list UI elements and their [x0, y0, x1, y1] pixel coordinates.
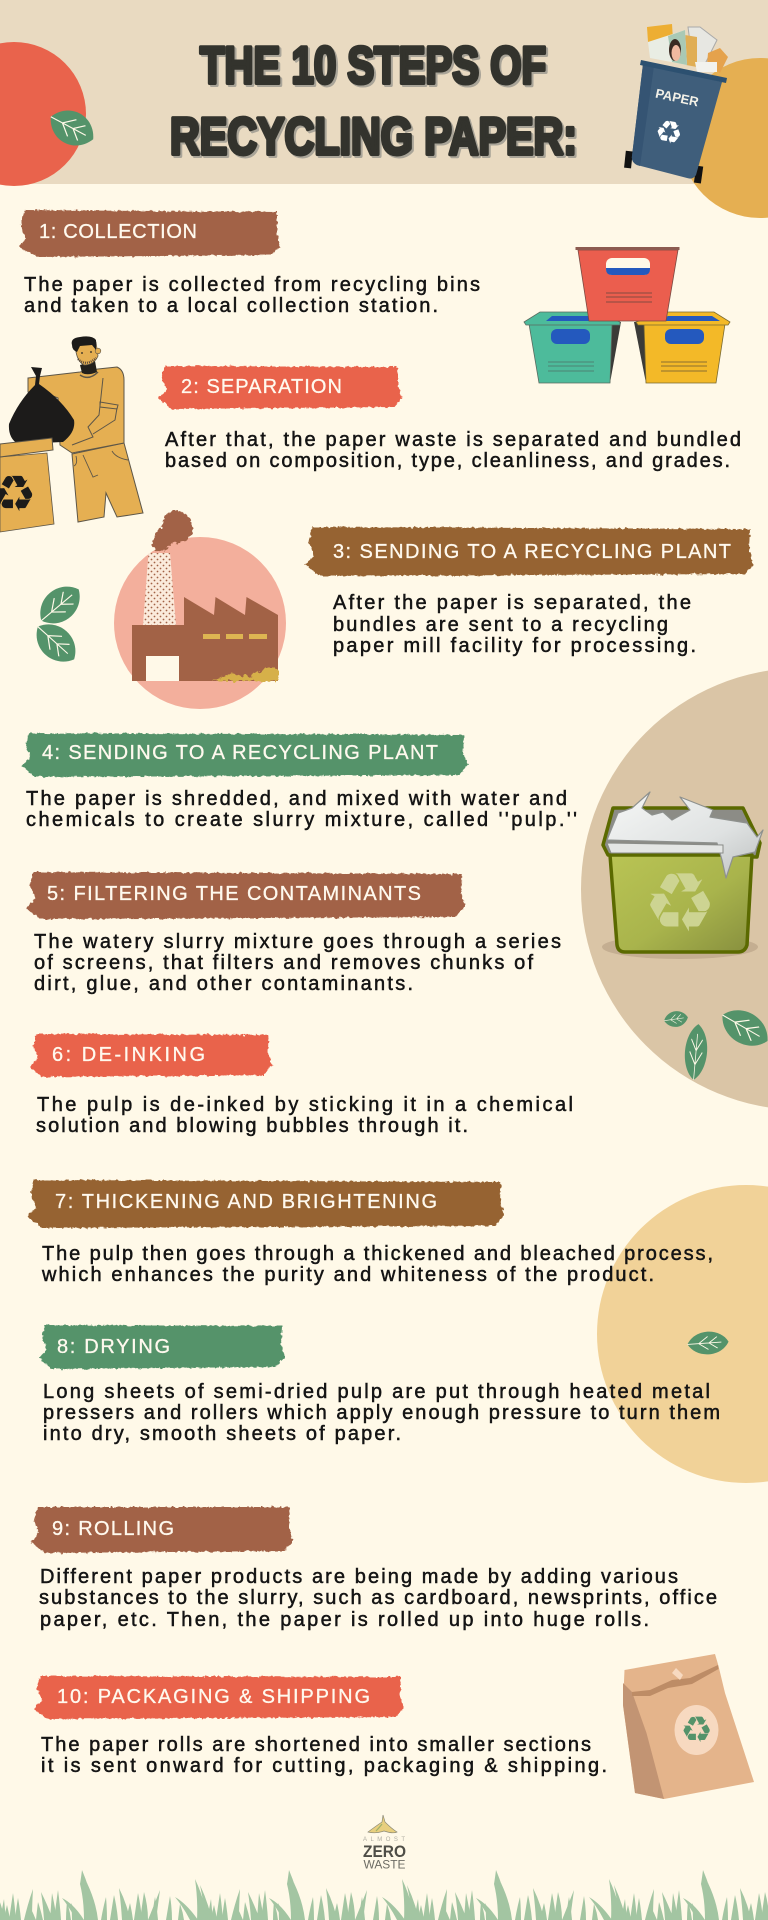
heading banner: 9: ROLLING: [52, 1518, 174, 1540]
body text: The paper rolls are shortened into smaller sections: [41, 1734, 591, 1756]
body text: [34, 931, 561, 995]
heading banner: [26, 872, 465, 919]
pants: [72, 443, 143, 522]
icon: blue paper bin: [624, 24, 728, 183]
door: [146, 656, 179, 681]
heading banner: [22, 733, 468, 777]
body text: Long sheets of semi-dried pulp are put through heated metal: [43, 1381, 710, 1403]
heading banner: [39, 1325, 285, 1369]
body text: After the paper is separated, the: [333, 592, 691, 614]
body text: dirt, glue, and other contaminants.: [34, 973, 413, 995]
heading banner: [31, 1507, 293, 1553]
body text: [165, 429, 741, 472]
body text: which enhances the purity and whiteness of the product.: [41, 1264, 654, 1286]
ground grass: [212, 668, 278, 681]
heading banner: 1: COLLECTION: [39, 221, 197, 243]
logo: almost zero waste: ZERO: [363, 1842, 406, 1861]
body text: Different paper products are being made by adding various: [40, 1566, 678, 1588]
crumpled paper: [607, 792, 763, 878]
body text: [41, 1243, 713, 1286]
icon: header leaf: [43, 102, 101, 154]
heading banner: [158, 366, 402, 409]
title: THE 10 STEPS OF: [200, 37, 546, 95]
heading banner: 3: SENDING TO A RECYCLING PLANT: [333, 541, 731, 563]
papers in bin: [647, 24, 728, 73]
body text: bundles are sent to a recycling: [333, 614, 668, 636]
factory building: [132, 597, 278, 681]
body text: [26, 788, 577, 831]
grass border: [0, 1870, 768, 1920]
body text: The pulp is de-inked by sticking it in a chemical: [37, 1094, 573, 1116]
illustration: man with trash bag: [0, 336, 143, 532]
logo: almost zero waste: ALMOST: [363, 1837, 405, 1843]
heading banner: [30, 1034, 272, 1077]
bin label: PAPER: [654, 86, 701, 110]
panel: step 9 rolling: [31, 1507, 717, 1631]
icon: green trash bin with paper: [602, 792, 763, 959]
heading banner: [27, 1180, 504, 1228]
heading banner: 10: PACKAGING & SHIPPING: [57, 1686, 370, 1708]
recycling symbol: ♻: [643, 856, 717, 951]
icon: paper bag: [623, 1654, 754, 1799]
body text: The pulp then goes through a thickened and bleached process,: [42, 1243, 713, 1265]
body text: it is sent onward for cutting, packaging & shipping.: [41, 1755, 607, 1777]
panel: step 1 collection: [19, 210, 480, 317]
panel: step 4 shredding: [22, 733, 577, 831]
chimney: [143, 553, 176, 625]
panel: step 2 separation: [158, 366, 741, 472]
body text: The paper is shredded, and mixed with water and: [26, 788, 567, 810]
trash bag: [9, 367, 74, 444]
body text: pressers and rollers which apply enough pressure to turn them: [43, 1402, 720, 1424]
body text: into dry, smooth sheets of paper.: [43, 1423, 401, 1445]
decorative circle: orange: [680, 58, 768, 218]
heading banner: 7: THICKENING AND BRIGHTENING: [55, 1191, 437, 1213]
logo: almost zero waste: [363, 1815, 406, 1872]
icon: left leaves: [27, 577, 89, 671]
yellow bin: [634, 312, 730, 383]
body text: [36, 1094, 573, 1137]
panel: step 3 sending to plant: [305, 527, 753, 657]
heading banner: 5: FILTERING THE CONTAMINANTS: [47, 883, 421, 905]
smoke: [153, 510, 193, 551]
panel: step 8 drying: [39, 1325, 720, 1445]
panel: step 6 de-inking: [30, 1034, 573, 1137]
body text: solution and blowing bubbles through it.: [36, 1115, 468, 1137]
body text: paper mill facility for processing.: [333, 635, 696, 657]
decorative circle: red: [0, 42, 86, 186]
panel: step 10 packaging: [34, 1676, 607, 1777]
red bin: [576, 247, 680, 321]
title: RECYCLING PAPER:: [170, 108, 577, 166]
decorative circle: tan: [581, 668, 768, 1110]
recycling bin: [0, 438, 54, 532]
body text: [41, 1734, 607, 1777]
logo: almost zero waste: WASTE: [364, 1860, 406, 1872]
body text: The paper is collected from recycling bins: [24, 274, 480, 296]
body text: [24, 274, 480, 317]
body text: paper, etc. Then, the paper is rolled up into huge rolls.: [40, 1609, 649, 1631]
shirt: [28, 367, 124, 453]
body text: [43, 1381, 720, 1445]
bin front rim: [607, 843, 723, 853]
icon: stacked recycling bins: [524, 247, 730, 383]
heading banner: [19, 210, 280, 257]
recycling symbol: ♻: [652, 113, 686, 153]
body text: and taken to a local collection station.: [24, 295, 438, 317]
icon: leaves on tan circle: [663, 1001, 768, 1081]
heading banner: 2: SEPARATION: [181, 376, 342, 398]
body text: [333, 592, 696, 657]
title: [170, 37, 577, 166]
heading banner: 8: DRYING: [57, 1336, 170, 1358]
body text: of screens, that filters and removes chunks of: [34, 952, 533, 974]
heading banner: 6: DE-INKING: [52, 1044, 205, 1066]
heading banner: [305, 527, 753, 576]
heading banner: 4: SENDING TO A RECYCLING PLANT: [42, 742, 438, 764]
icon: leaf on yellow circle: [687, 1330, 729, 1356]
recycling symbol: ♻: [680, 1710, 713, 1751]
body text: [39, 1566, 717, 1631]
body text: substances to the slurry, such as cardboard, newsprints, office: [39, 1587, 717, 1609]
header band: [0, 0, 768, 184]
heading banner: [34, 1676, 404, 1719]
panel: step 7 thickening: [27, 1180, 713, 1286]
panel: step 5 filtering: [26, 872, 561, 995]
body text: After that, the paper waste is separated and bundled: [165, 429, 741, 451]
body text: based on composition, type, cleanliness, and grades.: [165, 450, 730, 472]
banana peel: [368, 1815, 397, 1833]
body text: The watery slurry mixture goes through a series: [34, 931, 561, 953]
head: [72, 336, 101, 374]
green bin: [524, 312, 621, 383]
illustration: factory: [114, 510, 286, 709]
body text: chemicals to create slurry mixture, called ''pulp.'': [26, 809, 577, 831]
decorative circle: pale yellow: [597, 1185, 768, 1483]
windows: [203, 634, 267, 639]
